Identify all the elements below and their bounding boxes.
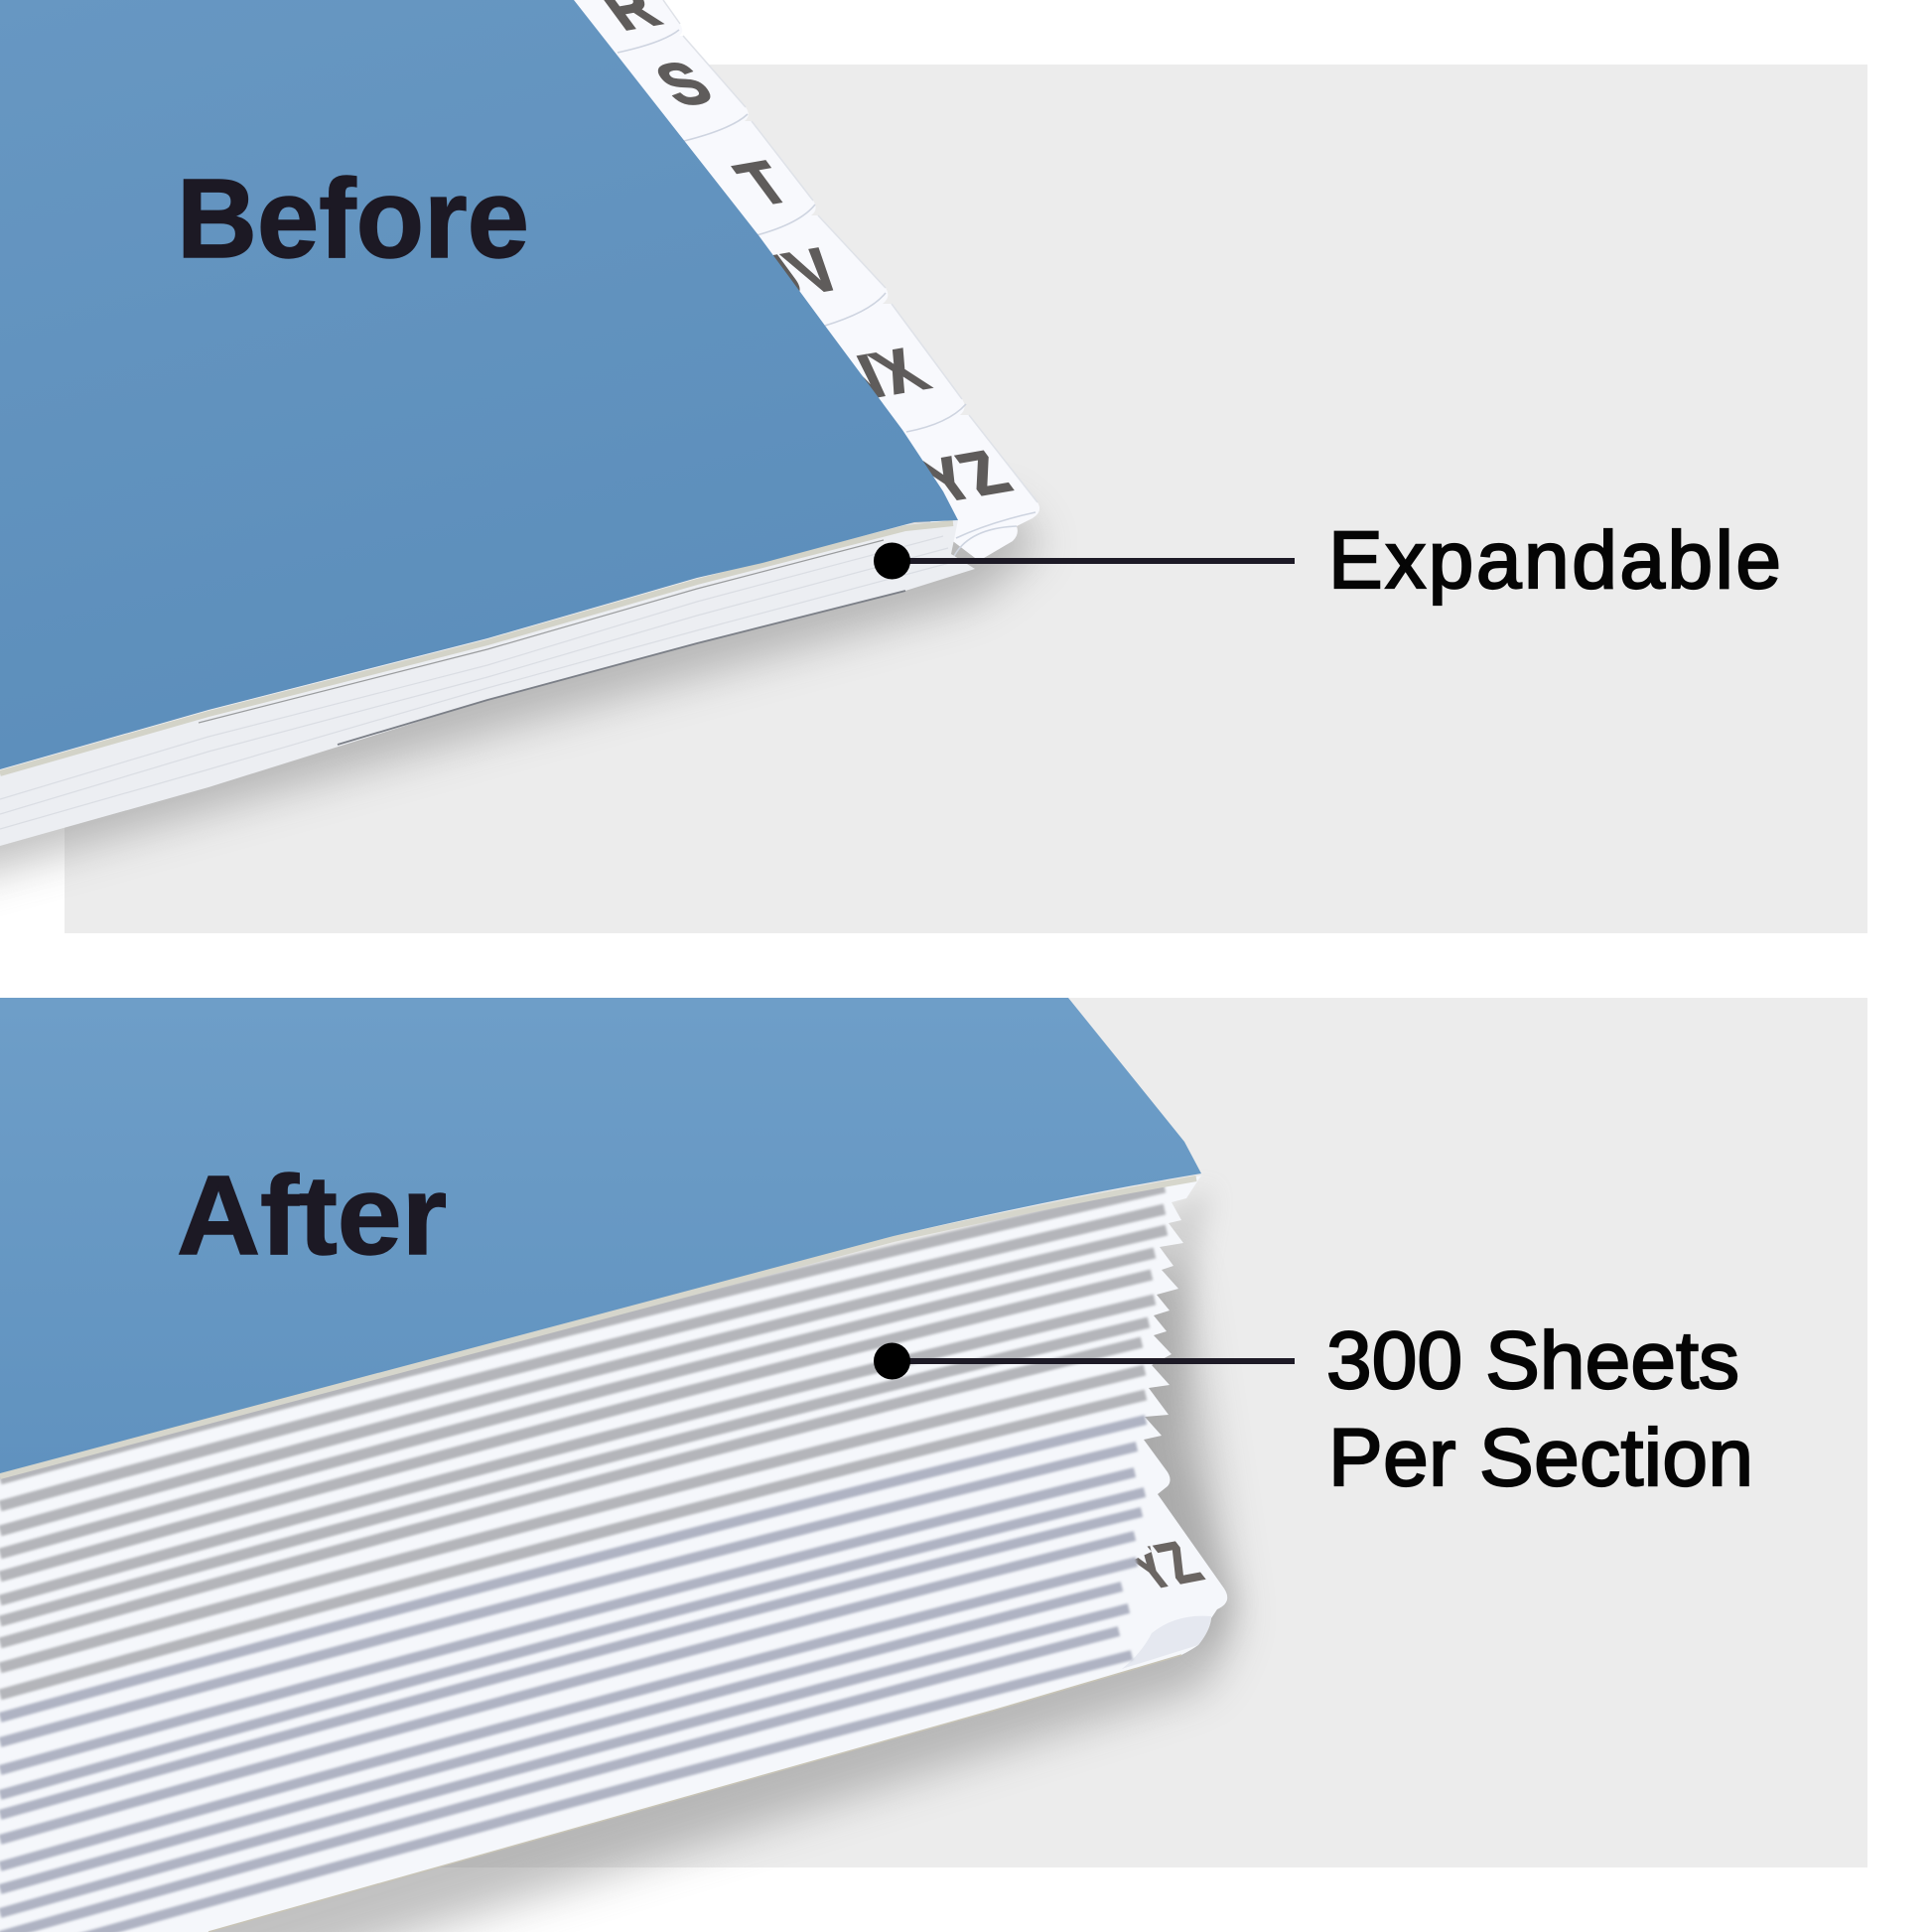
- page lines: [0, 536, 953, 829]
- blue front cover: [0, 998, 1201, 1473]
- tab letters: YZ: [904, 439, 1024, 514]
- back cover notch: [1122, 1616, 1211, 1669]
- tab letters: [586, 0, 1024, 514]
- sheet shadows lower: [0, 1420, 1146, 1932]
- cover cream edge: [0, 523, 953, 773]
- heading: After: After: [177, 1153, 447, 1278]
- callout label: 300 Sheets Per Section: Per Section: [1328, 1413, 1753, 1503]
- tab letters: S: [641, 50, 726, 119]
- index tabs sheet: [566, 0, 1039, 561]
- expanded stack shadow: [127, 1187, 1236, 1932]
- tab letters: T: [723, 149, 804, 217]
- bottom dark edge: [338, 591, 905, 745]
- tab edge highlight: [663, 0, 1037, 502]
- tab dividers: [618, 30, 1035, 558]
- callout: expandable pointer: [874, 542, 1295, 580]
- tab letters: UV: [731, 236, 856, 313]
- panel: after background: [65, 998, 1867, 1867]
- cover cream edge: [0, 1178, 1196, 1476]
- before: closed folder photo: [0, 0, 1042, 883]
- callout: sheets pointer: [874, 1342, 1295, 1380]
- bottom edge line: [208, 1655, 1181, 1932]
- tab letters: WX: [803, 337, 941, 415]
- heading: Before: Before: [177, 156, 529, 281]
- stack of white sheets silhouette: [0, 1175, 1227, 1932]
- after: expanded folder photo: [0, 998, 1236, 1932]
- callout label: 300 Sheets Per Section: [1326, 1315, 1753, 1503]
- cover dark underline: [199, 540, 884, 723]
- page block edge: [0, 520, 975, 846]
- tab letters YZ: YZ: [1112, 1531, 1215, 1601]
- blue front cover: [0, 0, 958, 769]
- sheet shadows upper: [0, 1187, 1167, 1695]
- callout label: Expandable: Expandable: [1328, 515, 1781, 606]
- callout label: 300 Sheets Per Section: 300 Sheets: [1326, 1315, 1739, 1406]
- sheets covering the tab: [0, 1489, 1160, 1932]
- folder drop shadow: [0, 500, 1042, 883]
- panel: before background: [65, 65, 1867, 933]
